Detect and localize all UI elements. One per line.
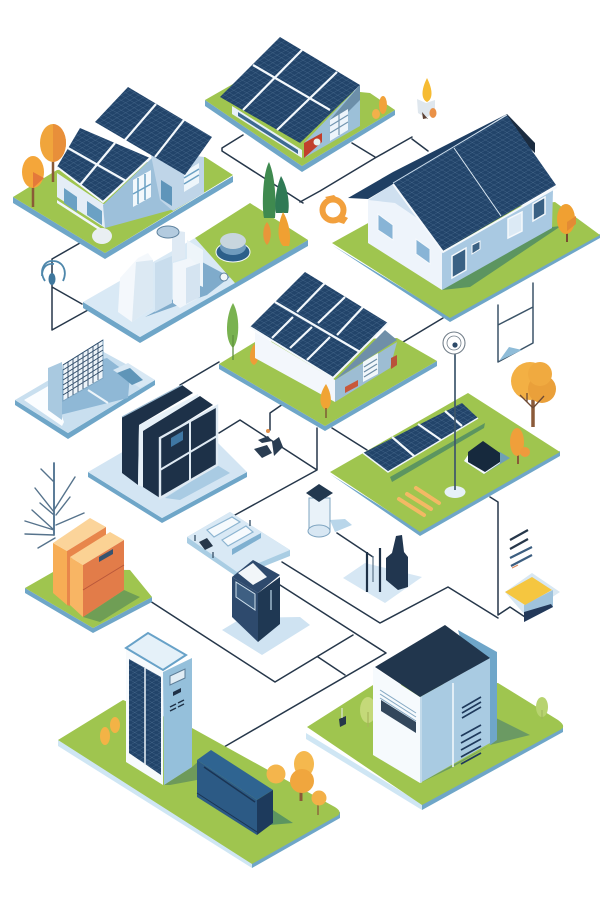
panel: solar field <box>330 332 560 536</box>
icon: list lines <box>510 530 532 568</box>
tree <box>557 204 576 242</box>
platform <box>205 80 395 172</box>
platform <box>25 568 152 633</box>
icon: orange tree <box>511 362 556 427</box>
round tank <box>216 233 250 262</box>
small trees <box>372 96 387 119</box>
tower <box>126 633 200 785</box>
cabinets <box>122 385 217 498</box>
panel: bottom left site <box>58 633 340 868</box>
ground shadow <box>442 226 561 290</box>
white towers <box>118 226 228 322</box>
icon: orange gear <box>322 195 348 224</box>
icon: antenna <box>42 261 65 285</box>
orange bars <box>399 488 439 515</box>
billboard <box>48 340 108 420</box>
panel: house top centre <box>205 37 395 172</box>
small tree <box>510 428 530 464</box>
platform <box>15 350 155 439</box>
platform <box>219 338 437 431</box>
panel: solar billboard platform <box>15 340 155 439</box>
icon: valve <box>254 429 283 458</box>
panel: switch platform <box>187 512 290 577</box>
panel: black cabinet <box>88 385 247 523</box>
connection lines <box>52 135 533 747</box>
icon: bare tree <box>25 463 84 548</box>
walls <box>368 184 553 290</box>
solar roof <box>57 87 212 202</box>
cabinet body <box>232 560 280 642</box>
solar roof <box>250 272 388 378</box>
frame fill <box>499 347 522 361</box>
small trees <box>339 697 548 727</box>
solar roof <box>348 114 557 252</box>
panel: house centre <box>219 272 437 431</box>
walls <box>57 150 204 234</box>
ornament <box>92 228 112 244</box>
trees <box>227 303 258 365</box>
battery back <box>53 518 106 606</box>
panel: dark cabinet <box>222 560 310 655</box>
solar array <box>363 403 478 472</box>
battery front <box>70 532 124 617</box>
pine trees <box>263 162 290 246</box>
trees <box>100 717 326 815</box>
platform <box>83 203 308 343</box>
panel: big house right <box>332 114 600 322</box>
ground shadow <box>390 423 485 482</box>
icon: yellow box <box>505 573 560 622</box>
panel: house top left <box>13 87 233 259</box>
battery block <box>197 750 293 835</box>
panel: bottom right site <box>306 625 563 810</box>
solar roof <box>220 37 360 143</box>
house walls <box>232 85 360 158</box>
platform <box>330 393 560 536</box>
shadows <box>420 715 530 783</box>
dark box <box>464 441 510 474</box>
platform <box>13 157 233 259</box>
front tree <box>320 384 331 418</box>
panel: pavilion <box>306 484 352 537</box>
tubes <box>207 517 253 546</box>
pole with sensor <box>443 332 466 498</box>
panel: transformer towers <box>343 535 422 603</box>
platform <box>88 430 247 523</box>
platform <box>306 683 563 810</box>
platform <box>332 202 600 322</box>
panel: treatment plant <box>83 162 308 343</box>
trees <box>22 124 66 207</box>
building <box>373 625 497 783</box>
panel: orange batteries <box>25 518 152 633</box>
walls <box>255 330 397 402</box>
icon: flame lamp <box>417 78 436 119</box>
platform <box>58 700 340 868</box>
